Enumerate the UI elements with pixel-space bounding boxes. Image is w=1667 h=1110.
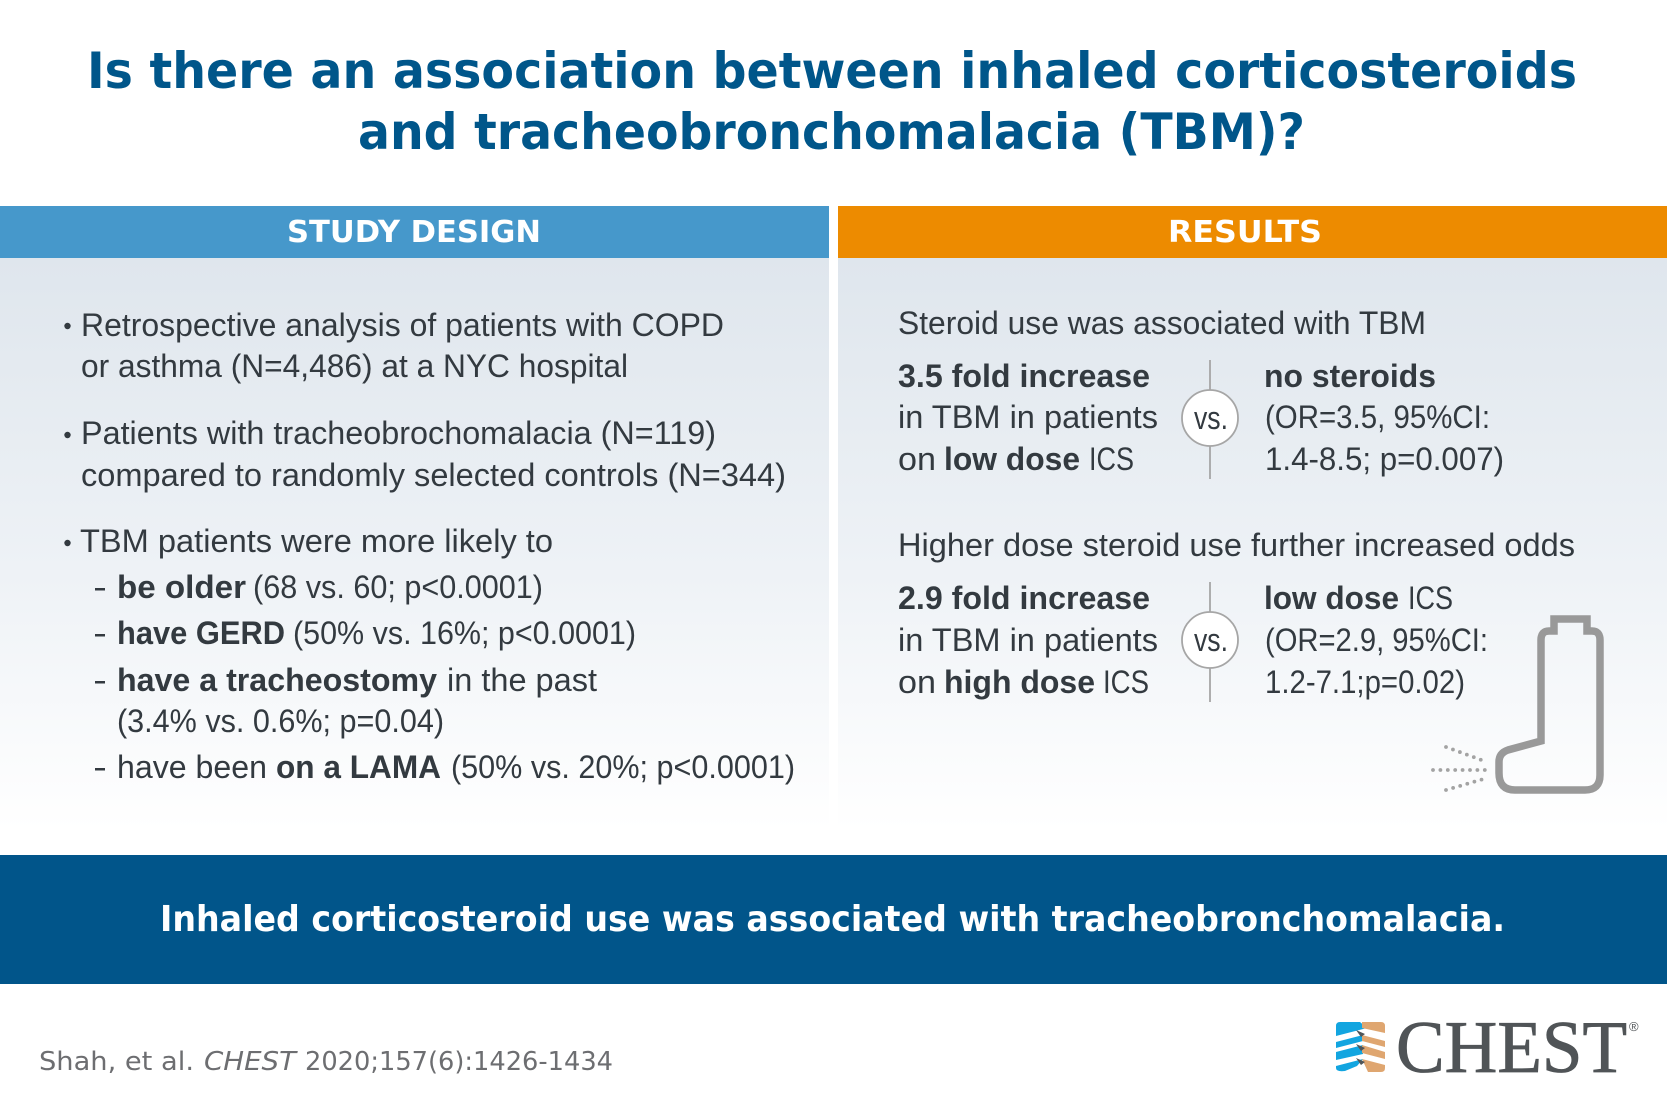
- text block: retrospective analysis bullet: Retrospective analysis of patients with COPD: [81, 307, 724, 343]
- text: low dose result: low dose: [944, 441, 1080, 477]
- text: steroid use heading: Steroid use was associated with TBM: [898, 305, 1426, 341]
- icon: ribbon mark: [1336, 1022, 1385, 1072]
- text block: retrospective analysis bullet: or asthma (N=4,486) at a NYC hospital: [81, 348, 628, 384]
- text: high dose result: [898, 580, 1158, 700]
- text: higher dose heading: Higher dose steroid use further increased odds: [898, 527, 1575, 563]
- text: low dose comparison: low dose: [1264, 580, 1399, 616]
- text block: patients compared bullet: [64, 415, 786, 493]
- text: low dose result: ICS: [1089, 441, 1134, 477]
- banner: conclusion: [0, 855, 1667, 984]
- text: low dose result: 3.5 fold increase: [898, 358, 1150, 394]
- text: low dose result: on: [898, 441, 936, 477]
- icon: vs divider high dose: [1182, 582, 1238, 702]
- heading: study design: [0, 206, 829, 258]
- text block: TBM patient characteristics: (68 vs. 60; p<0.0001): [253, 569, 543, 605]
- heading: study design: STUDY DESIGN: [287, 215, 541, 250]
- text block: TBM patient characteristics: TBM patients were more likely to: [80, 523, 553, 559]
- text block: TBM patient characteristics: have been: [117, 749, 267, 785]
- icon: vs divider low dose: [1182, 360, 1238, 479]
- text block: TBM patient characteristics: have GERD: [117, 615, 285, 651]
- citation: CHEST: [204, 1047, 298, 1077]
- text: high dose result: in TBM in patients: [898, 622, 1158, 658]
- text block: TBM patient characteristics: (50% vs. 20%; p<0.0001): [451, 749, 795, 785]
- title: Is there an association between inhaled corticosteroids: [87, 42, 1577, 100]
- text: high dose result: on: [898, 664, 936, 700]
- text: high dose result: high dose: [944, 664, 1095, 700]
- text block: TBM patient characteristics: (50% vs. 16%; p<0.0001): [293, 615, 636, 651]
- heading: results: [838, 206, 1667, 258]
- text block: TBM patient characteristics: be older: [117, 569, 246, 605]
- text: no steroids comparison: no steroids: [1264, 358, 1436, 394]
- text: low dose comparison: 1.2-7.1;p=0.02): [1265, 664, 1465, 700]
- text: no steroids comparison: (OR=3.5, 95%CI:: [1265, 399, 1490, 435]
- text: low dose comparison: (OR=2.9, 95%CI:: [1265, 622, 1488, 658]
- text: no steroids comparison: [1264, 358, 1504, 477]
- text: high dose result: ICS: [1103, 664, 1149, 700]
- logo: CHEST: ®: [1629, 1019, 1639, 1034]
- text: high dose result: 2.9 fold increase: [898, 580, 1150, 616]
- text: no steroids comparison: 1.4-8.5; p=0.007): [1265, 441, 1504, 477]
- text block: TBM patient characteristics: have a tracheostomy: [117, 662, 437, 698]
- title: [87, 42, 1577, 161]
- panel: results: [838, 206, 1667, 830]
- citation: [39, 1047, 613, 1077]
- text block: patients compared bullet: Patients with tracheobrochomalacia (N=119): [81, 415, 716, 451]
- icon: inhaler with spray: [1433, 619, 1600, 790]
- icon: vs divider low dose: vs.: [1194, 400, 1228, 436]
- citation: 2020;157(6):1426-1434: [305, 1047, 613, 1077]
- citation: Shah, et al.: [39, 1047, 194, 1077]
- text: low dose result: in TBM in patients: [898, 399, 1158, 435]
- panel: study design: [0, 206, 829, 830]
- text block: TBM patient characteristics: on a LAMA: [276, 749, 441, 785]
- title: and tracheobronchomalacia (TBM)?: [358, 103, 1305, 161]
- text: low dose comparison: [1264, 580, 1488, 700]
- text block: TBM patient characteristics: [64, 523, 795, 785]
- text: low dose result: [898, 358, 1158, 477]
- logo: CHEST: CHEST: [1396, 1007, 1627, 1089]
- text block: patients compared bullet: compared to randomly selected controls (N=344): [81, 457, 786, 493]
- text: low dose comparison: ICS: [1408, 580, 1453, 616]
- banner: conclusion: Inhaled corticosteroid use was associated with tracheobronchomalacia.: [160, 899, 1505, 940]
- icon: vs divider high dose: vs.: [1194, 622, 1228, 658]
- text block: TBM patient characteristics: (3.4% vs. 0.6%; p=0.04): [117, 703, 444, 739]
- text block: retrospective analysis bullet: [64, 307, 724, 384]
- heading: results: RESULTS: [1168, 215, 1322, 250]
- text block: TBM patient characteristics: in the past: [447, 662, 597, 698]
